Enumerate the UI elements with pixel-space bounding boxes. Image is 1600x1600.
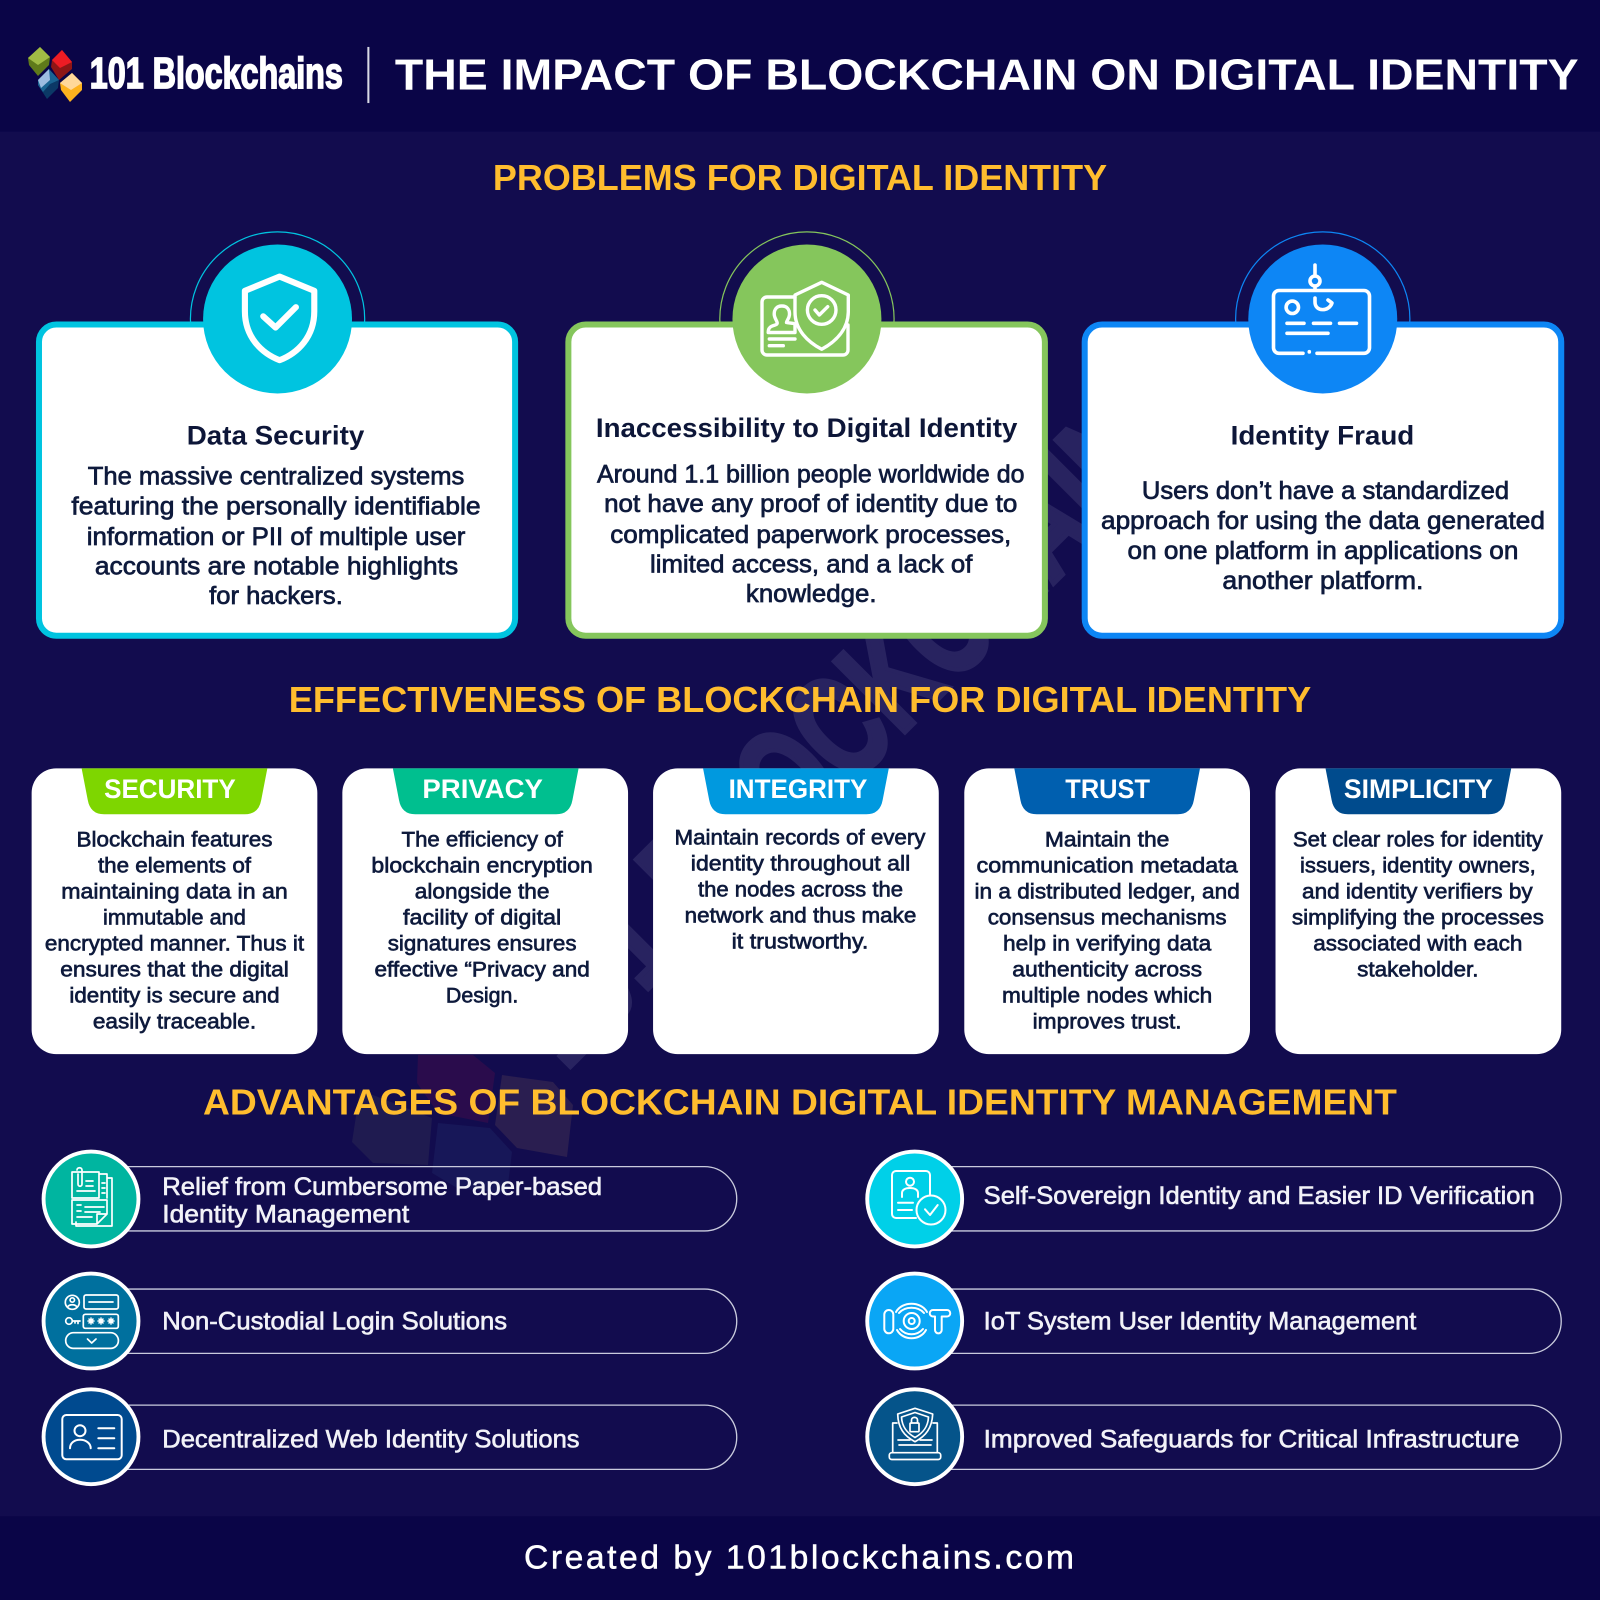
item text: Self-Sovereign Identity and Easier ID Verification	[984, 1182, 1535, 1210]
item text: Relief from Cumbersome Paper-based	[162, 1173, 602, 1201]
tab label: INTEGRITY	[729, 774, 868, 804]
panel: privacy	[342, 768, 628, 1054]
icon: id card and shield	[762, 282, 848, 355]
icon: login form	[65, 1295, 118, 1348]
card text: Around 1.1 billion people worldwide do	[597, 461, 1024, 489]
panel: security	[32, 768, 317, 1054]
card text: The massive centralized systems	[88, 463, 464, 491]
card text: information or PII of multiple user	[87, 523, 465, 551]
list item: decentralized web identity	[44, 1389, 737, 1484]
tab: integrity	[703, 768, 889, 814]
card text: improves trust.	[1033, 1010, 1182, 1034]
card text: Design.	[446, 984, 518, 1008]
card text	[1292, 827, 1544, 982]
tab label: TRUST	[1065, 774, 1150, 804]
tab: trust	[1014, 768, 1200, 814]
panel: identity fraud	[1085, 232, 1561, 636]
card text: blockchain encryption	[371, 853, 593, 877]
item text: Decentralized Web Identity Solutions	[162, 1426, 580, 1454]
card text: Maintain the	[1045, 827, 1169, 851]
panel: data security	[39, 232, 515, 636]
card text: network and thus make	[685, 903, 916, 927]
list item: paper-based identity	[44, 1152, 737, 1246]
card text: the nodes across the	[698, 877, 903, 901]
card text: complicated paperwork processes,	[610, 521, 1011, 549]
tab: simplicity	[1326, 768, 1511, 814]
card text	[974, 827, 1240, 1034]
header band	[0, 0, 1600, 132]
card text: signatures ensures	[388, 932, 577, 956]
card text: effective “Privacy and	[374, 958, 590, 982]
list item: iot identity	[867, 1274, 1561, 1368]
footer credit: Created by 101blockchains.com	[524, 1539, 1074, 1576]
card title: Data Security	[187, 420, 365, 450]
card text: multiple nodes which	[1002, 984, 1212, 1008]
card text	[597, 461, 1024, 608]
header divider	[367, 47, 369, 103]
card text: consensus mechanisms	[988, 905, 1227, 929]
heading: effectiveness: EFFECTIVENESS OF BLOCKCHAIN FOR DIGITAL IDENTITY	[289, 679, 1311, 720]
card text	[71, 463, 481, 610]
card text: help in verifying data	[1003, 932, 1211, 956]
item text: IoT System User Identity Management	[984, 1308, 1416, 1336]
card text: it trustworthy.	[732, 929, 868, 953]
list item: critical infrastructure	[867, 1389, 1561, 1484]
card text: ensures that the digital	[60, 958, 289, 982]
icon: shield with check	[245, 277, 314, 360]
item text	[162, 1173, 602, 1228]
tab label: PRIVACY	[422, 774, 543, 804]
card text: the elements of	[98, 853, 251, 877]
card text: facility of digital	[403, 905, 561, 929]
card text: associated with each	[1313, 932, 1522, 956]
item text: Identity Management	[162, 1200, 409, 1228]
icon: phishing hook on id card	[1274, 265, 1370, 353]
card text: on one platform in applications on	[1128, 537, 1518, 565]
card text: in a distributed ledger, and	[974, 879, 1240, 903]
card text: communication metadata	[977, 853, 1238, 877]
card text: featuring the personally identifiable	[71, 492, 481, 520]
watermark: faint logo cubes	[352, 1055, 573, 1193]
card text: Users don’t have a standardized	[1142, 477, 1509, 505]
card text: for hackers.	[209, 582, 343, 610]
card text: alongside the	[415, 879, 549, 903]
card title: Identity Fraud	[1231, 420, 1414, 450]
panel: inaccessibility	[568, 232, 1045, 636]
tab label: SECURITY	[104, 774, 236, 804]
tab: privacy	[393, 768, 579, 814]
card text: limited access, and a lack of	[650, 550, 972, 578]
footer band	[0, 1516, 1600, 1600]
card text: maintaining data in an	[61, 879, 288, 903]
icon: id card	[62, 1415, 122, 1459]
card text: authenticity across	[1012, 958, 1202, 982]
card text: not have any proof of identity due to	[604, 490, 1017, 518]
card text	[674, 825, 926, 953]
icon: documents	[72, 1168, 112, 1226]
main title: THE IMPACT OF BLOCKCHAIN ON DIGITAL IDENTITY	[395, 51, 1579, 99]
watermark: 101 Blockchains diagonal text: 101 BLOCKCHAINS	[473, 326, 1240, 1093]
card text: Blockchain features	[77, 827, 272, 851]
list item: non-custodial login	[44, 1274, 737, 1368]
card text: and identity verifiers by	[1302, 879, 1533, 903]
logo wordmark: 101 Blockchains	[90, 49, 343, 98]
card text: The efficiency of	[402, 827, 563, 851]
icon: iot	[884, 1304, 950, 1338]
heading: advantages: ADVANTAGES OF BLOCKCHAIN DIGITAL IDENTITY MANAGEMENT	[203, 1081, 1397, 1122]
card text	[45, 827, 304, 1034]
card text: simplifying the processes	[1292, 905, 1544, 929]
card text	[371, 827, 593, 1008]
tab label: SIMPLICITY	[1344, 774, 1493, 804]
panel: integrity	[653, 768, 939, 1054]
icon: laptop with shield	[889, 1408, 941, 1460]
card text: immutable and	[103, 905, 246, 929]
item text: Non-Custodial Login Solutions	[162, 1308, 507, 1336]
icon: profile with check	[892, 1171, 946, 1224]
card text: identity throughout all	[691, 851, 910, 875]
card title: Inaccessibility to Digital Identity	[596, 413, 1018, 443]
card text: encrypted manner. Thus it	[45, 932, 304, 956]
card text: another platform.	[1222, 567, 1423, 595]
card text: identity is secure and	[69, 984, 280, 1008]
heading: problems: PROBLEMS FOR DIGITAL IDENTITY	[493, 157, 1107, 198]
card text: issuers, identity owners,	[1300, 853, 1536, 877]
logo cubes	[28, 47, 82, 102]
item text: Improved Safeguards for Critical Infrastructure	[984, 1426, 1519, 1454]
card text: Set clear roles for identity	[1293, 827, 1543, 851]
card text	[1101, 477, 1545, 595]
card text: easily traceable.	[93, 1010, 256, 1034]
card text: Maintain records of every	[674, 825, 926, 849]
panel: simplicity	[1276, 768, 1561, 1054]
list item: self-sovereign identity	[867, 1152, 1561, 1246]
card text: knowledge.	[746, 580, 877, 608]
card text: stakeholder.	[1357, 958, 1479, 982]
card text: accounts are notable highlights	[95, 552, 458, 580]
card text: approach for using the data generated	[1101, 507, 1545, 535]
tab: security	[82, 768, 267, 814]
panel: trust	[964, 768, 1250, 1054]
